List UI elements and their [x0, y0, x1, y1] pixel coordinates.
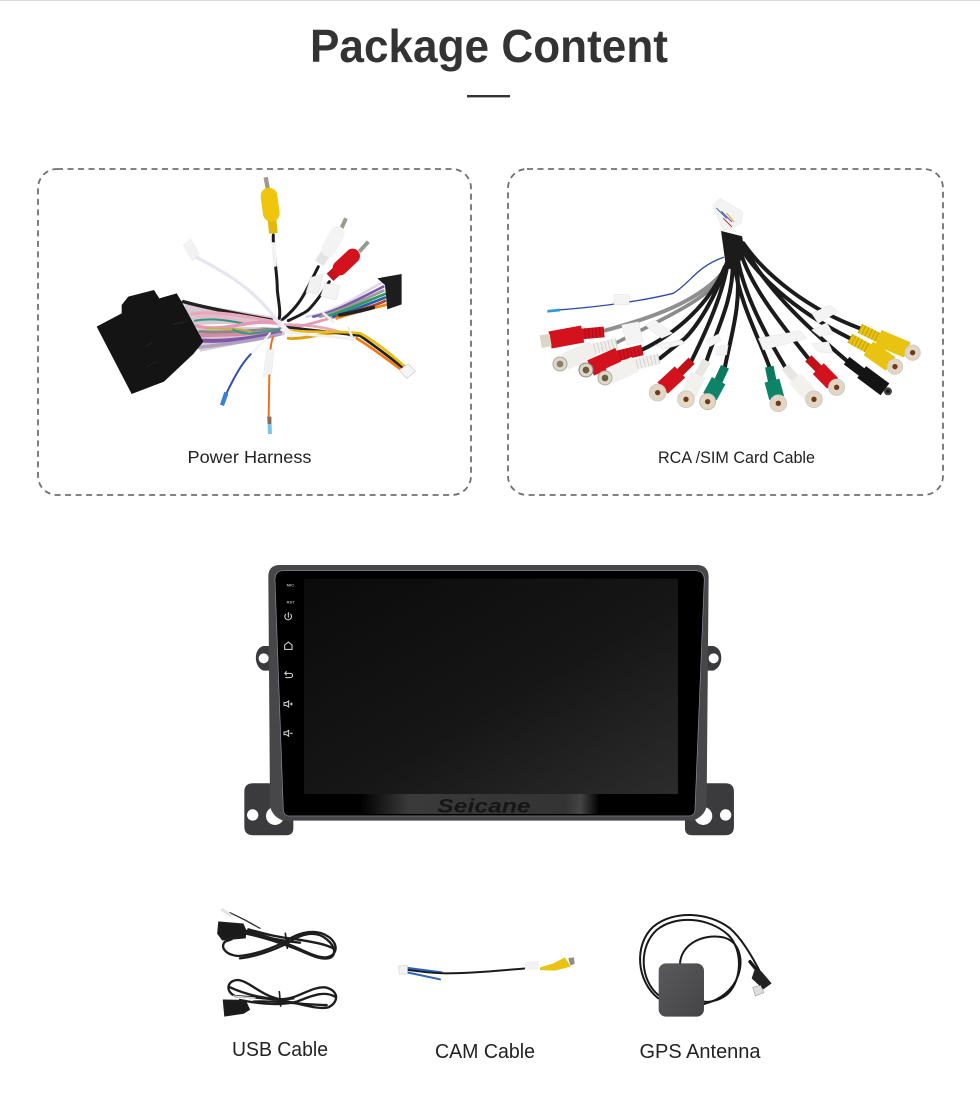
icon: white RCA plug — [283, 218, 346, 319]
wire bundle right — [280, 282, 405, 370]
grey cables — [603, 265, 728, 331]
icon: antenna puck — [659, 963, 704, 1017]
icon: white plug connector top-left and its cable — [183, 239, 280, 325]
icon: center-right RCA jacks — [769, 358, 845, 412]
ties — [275, 318, 292, 335]
logo strip — [304, 794, 678, 814]
label: USB Cable: USB Cable — [232, 1039, 328, 1061]
label: GPS Antenna: GPS Antenna — [640, 1041, 761, 1063]
side labels: MIC — [287, 582, 294, 587]
icon: power — [285, 613, 291, 620]
top mounting ears — [256, 646, 721, 671]
panel border — [508, 169, 943, 495]
panel: RCA / SIM card cable — [508, 169, 943, 495]
panel border — [38, 169, 471, 495]
outer frame — [268, 565, 709, 821]
black cables — [642, 232, 860, 367]
bezel — [275, 571, 704, 816]
car head unit — [244, 565, 734, 835]
blue terminal — [547, 309, 560, 313]
icon: small right connector — [377, 274, 402, 309]
RCA cable photo — [541, 198, 920, 412]
icon: orange ring terminal — [263, 337, 274, 434]
title: Package Content — [310, 20, 668, 72]
icon: white plug bottom-right — [399, 364, 415, 379]
icon: right-angle plug — [752, 968, 772, 989]
icon: center-left RCA jacks — [649, 361, 725, 410]
connector — [398, 965, 407, 974]
bottom mounting brackets — [244, 783, 734, 835]
label: RCA /SIM Card Cable: RCA /SIM Card Cable — [658, 449, 815, 467]
icon: volume down — [284, 730, 293, 736]
icon: USB cable two — [224, 980, 336, 1015]
icon: volume up — [284, 701, 293, 707]
icon: blue spade terminal — [220, 333, 270, 406]
harness photo — [97, 177, 415, 434]
car head unit: RST — [287, 599, 295, 604]
accessory: GPS antenna — [640, 915, 772, 1017]
icon: black audio jack — [847, 361, 892, 395]
cable coil — [640, 915, 762, 1004]
wires — [408, 968, 442, 972]
accessory: USB cables — [218, 910, 336, 1015]
icon: back — [285, 671, 293, 678]
logo: Seicane — [437, 797, 531, 818]
screen — [304, 579, 678, 794]
accessory: CAM cable — [398, 957, 575, 979]
top white connector — [713, 198, 743, 230]
wire bundle left — [183, 302, 285, 352]
panel: power harness — [38, 169, 471, 495]
title underline — [467, 95, 510, 97]
wire labels — [306, 274, 323, 293]
labels — [614, 295, 838, 355]
label: CAM Cable: CAM Cable — [435, 1041, 535, 1063]
icon: yellow RCA plug — [266, 177, 280, 318]
icon: red RCA plug — [288, 242, 368, 321]
label: Power Harness: Power Harness — [188, 447, 312, 467]
icon: yellow RCA jacks — [850, 328, 920, 374]
icon: yellow RCA — [540, 957, 571, 971]
icon: home — [285, 642, 292, 649]
icon: left RCA jacks — [541, 332, 659, 385]
label — [525, 961, 539, 971]
icon: black multi-pin connector left — [97, 290, 203, 394]
blue wire — [548, 257, 723, 311]
icon: USB cable one — [218, 910, 336, 959]
